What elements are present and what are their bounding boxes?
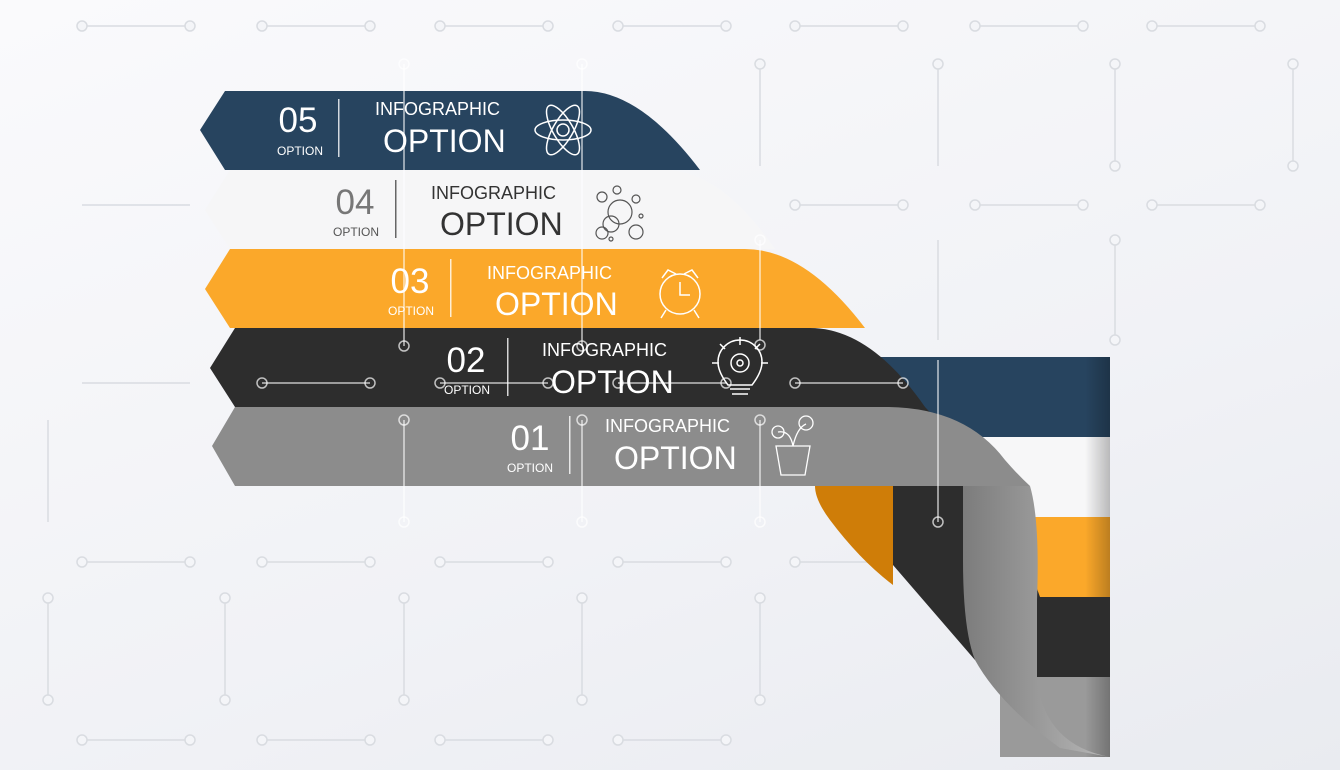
band 05: 05 bbox=[279, 101, 317, 140]
band 02: OPTION bbox=[444, 383, 490, 397]
circuit overlay on bands bbox=[257, 59, 943, 527]
band 03 bbox=[205, 249, 893, 585]
band 01: INFOGRAPHIC bbox=[605, 416, 730, 436]
band 01: 01 bbox=[511, 419, 549, 458]
band 04: INFOGRAPHIC bbox=[431, 183, 556, 203]
band 04: OPTION bbox=[440, 206, 563, 242]
band 05: OPTION bbox=[383, 123, 506, 159]
icon: flower pot bbox=[772, 416, 813, 475]
band 03: INFOGRAPHIC bbox=[487, 263, 612, 283]
band 05 bbox=[200, 91, 700, 170]
band 04: OPTION bbox=[333, 225, 379, 239]
icon: alarm clock bbox=[660, 270, 700, 318]
orange fold bbox=[815, 486, 893, 585]
band 03: OPTION bbox=[388, 304, 434, 318]
band 02: 02 bbox=[447, 341, 485, 380]
band 03: 03 bbox=[391, 262, 429, 301]
icon: atom bbox=[535, 101, 591, 159]
band 02 bbox=[210, 328, 1110, 677]
band 04: 04 bbox=[336, 183, 374, 222]
band 01: OPTION bbox=[614, 440, 737, 476]
band 02: INFOGRAPHIC bbox=[542, 340, 667, 360]
band 05: OPTION bbox=[277, 144, 323, 158]
icon: bubbles bbox=[596, 186, 643, 241]
band 01: OPTION bbox=[507, 461, 553, 475]
band 05: INFOGRAPHIC bbox=[375, 99, 500, 119]
band 01 bbox=[212, 407, 1110, 757]
right stripes panel bbox=[868, 357, 1110, 757]
band 03: OPTION bbox=[495, 286, 618, 322]
band 04 bbox=[205, 170, 775, 249]
icon: lightbulb gear bbox=[712, 337, 768, 394]
band 02: OPTION bbox=[551, 364, 674, 400]
